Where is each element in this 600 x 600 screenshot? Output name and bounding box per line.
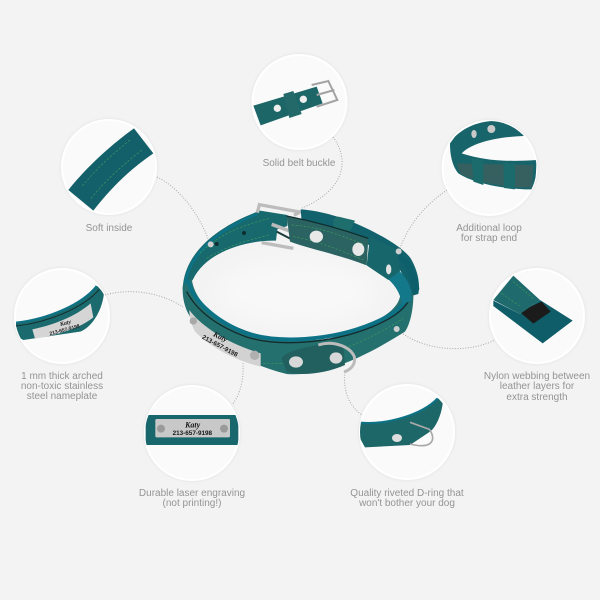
leader line: nameplate: [105, 292, 183, 307]
label: laser engraving: (not printing!): [163, 498, 221, 509]
right inner face: [388, 272, 412, 305]
holes: [471, 130, 477, 138]
back strap: [183, 211, 287, 290]
leader line: nylon webbing: [397, 329, 495, 349]
leader line: additional loop: [399, 190, 447, 251]
rivets: [157, 425, 165, 433]
keepers: [472, 164, 484, 185]
label: nylon webbing: Nylon webbing between: [484, 371, 590, 382]
label: additional loop: for strap end: [461, 233, 517, 244]
darker face: [457, 163, 533, 187]
label: nameplate: 1 mm thick arched: [21, 371, 103, 382]
leader line: laser engraving: [232, 363, 243, 405]
circle: nameplate: 213-657-9198: [49, 323, 81, 337]
front strap face: [183, 278, 413, 374]
leader line: soft inside: [157, 177, 210, 244]
buckle strap holes: [310, 231, 323, 243]
circle: nameplate: [15, 269, 109, 363]
D-ring rivets: [289, 356, 303, 368]
leather strip: [68, 128, 153, 211]
buckle frame: [257, 205, 300, 248]
circle: nylon webbing: [490, 269, 584, 363]
buckle prong: [272, 224, 292, 232]
label: nameplate: steel nameplate: [27, 391, 98, 402]
D-ring tab: [282, 343, 345, 374]
front strap dark seam: [187, 292, 411, 343]
label: D-ring: Quality riveted D-ring that: [350, 488, 464, 499]
rim: [360, 398, 438, 423]
back strap rim: [185, 214, 257, 290]
back stitching: [200, 218, 270, 253]
label: additional loop: Additional loop: [456, 223, 522, 234]
right strap section: [367, 237, 400, 280]
circle: D-ring: [360, 385, 454, 479]
rim: [16, 286, 97, 323]
front strap rim: [188, 281, 409, 339]
engraved name: Katy: [211, 329, 229, 344]
main collar: [183, 205, 419, 374]
upper loop strap: [301, 209, 419, 295]
label: additional loop: [456, 223, 522, 244]
circle: additional loop: [442, 121, 537, 215]
label: laser engraving: [139, 488, 245, 509]
label: belt buckle: Solid belt buckle: [263, 158, 336, 169]
label: D-ring: [350, 488, 464, 509]
right loop: [398, 253, 419, 295]
label: nylon webbing: [484, 371, 590, 403]
label: laser engraving: Durable laser engraving: [139, 488, 245, 499]
top leather: [493, 276, 540, 314]
engraved phone: 213-657-9198: [201, 334, 239, 359]
strap stitching: [292, 225, 365, 245]
label: nameplate: [21, 371, 103, 402]
right hole: [386, 264, 391, 274]
leader line: belt buckle: [302, 137, 342, 208]
body rivet: [394, 326, 400, 332]
circle: soft inside: [62, 120, 156, 214]
leader line: D-ring: [345, 372, 362, 415]
label: nylon webbing: extra strength: [506, 392, 568, 403]
label: soft inside: Soft inside: [86, 223, 133, 234]
keeper: [283, 91, 302, 118]
label: D-ring: won't bother your dog: [358, 498, 455, 509]
strap: [253, 87, 323, 125]
label: nameplate: non-toxic stainless: [21, 381, 103, 392]
buckle strap: [287, 216, 368, 265]
buckle: [312, 81, 337, 107]
nameplate rivets: [190, 317, 197, 325]
plate: [155, 419, 230, 437]
nylon: [519, 302, 551, 324]
rivets: [274, 105, 281, 112]
plate: [32, 303, 93, 339]
strap holes: [215, 242, 219, 246]
keeper: [333, 217, 355, 232]
band: [450, 121, 537, 189]
D-ring: [318, 343, 355, 372]
band: [146, 415, 238, 445]
circle: belt buckle: [252, 55, 346, 149]
nameplate: [189, 310, 261, 367]
front stitching: [263, 318, 403, 364]
collar inner glow: [216, 258, 376, 326]
ring: [410, 422, 433, 446]
prong shadow: [277, 232, 292, 239]
circle: laser engraving: [145, 386, 239, 480]
band: [360, 398, 443, 447]
engraved phone: 213-657-9198: [173, 430, 213, 437]
lower leather: [493, 300, 573, 343]
label: nylon webbing: leather layers for: [500, 381, 575, 392]
contact dot: [396, 248, 402, 254]
engraved text: Katy: [59, 319, 72, 328]
rivet: [392, 434, 402, 442]
band: [16, 286, 104, 340]
engraved name: Katy: [184, 421, 201, 430]
